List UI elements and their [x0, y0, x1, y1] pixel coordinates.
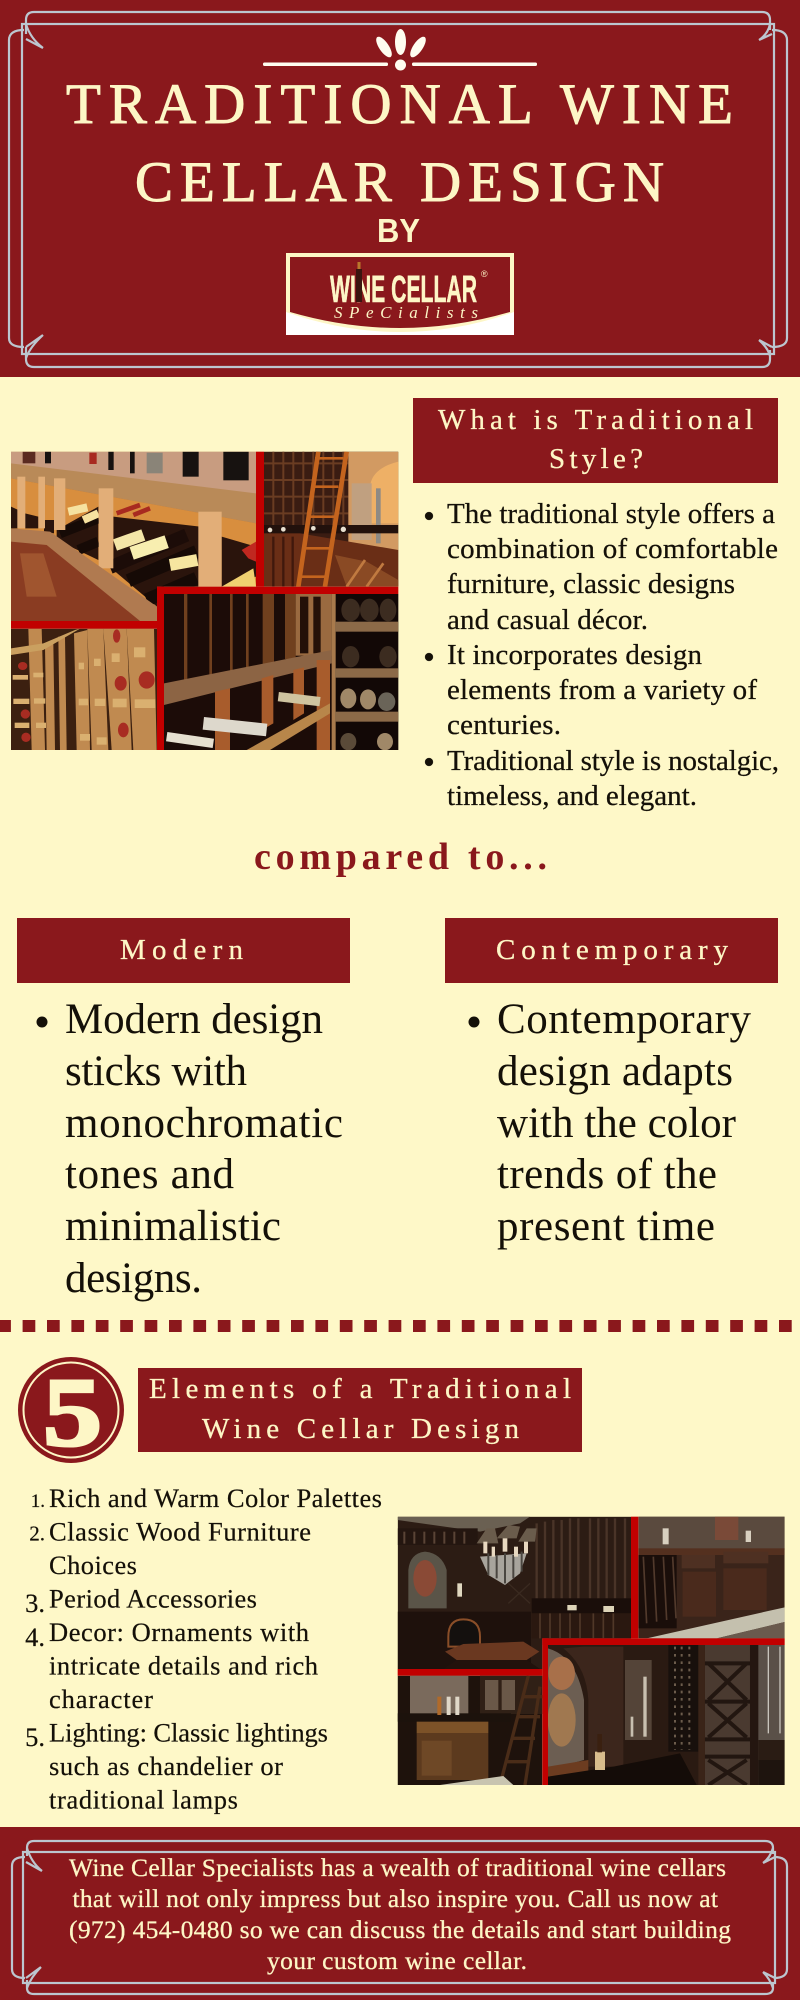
numbered list: five elements: intricate details and rich — [49, 1650, 318, 1680]
title: TRADITIONAL WINE — [66, 73, 733, 136]
logo: SPeCialists — [334, 303, 478, 322]
footer text: that will not only impress but also inspire you. Call us now at — [72, 1884, 718, 1913]
modern heading — [17, 918, 350, 983]
numbered list: five elements: traditional lamps — [49, 1784, 238, 1814]
heading: what is traditional style: What is Traditional — [438, 404, 753, 436]
panel: mural and lattice — [548, 1645, 785, 1785]
panel: ladder — [264, 452, 398, 587]
numbered list: five elements: character — [49, 1684, 153, 1714]
contemporary heading — [445, 918, 778, 983]
contemporary heading: Contemporary — [496, 934, 728, 966]
modern text: designs. — [65, 1255, 202, 1302]
footer text — [69, 1853, 731, 1975]
modern text: minimalistic — [65, 1203, 281, 1250]
bullet list: traditional style: and casual décor. — [447, 604, 648, 636]
numbered list: five elements: 5. — [25, 1722, 45, 1752]
header ornate frame — [9, 12, 787, 367]
bullet list: traditional style: elements from a variety of — [447, 674, 757, 706]
numbered list: five elements: Choices — [49, 1550, 137, 1580]
footer text: (972) 454-0480 so we can discuss the details and start building — [69, 1915, 731, 1944]
modern text: monochromatic — [65, 1100, 343, 1147]
collage dividers — [398, 1517, 785, 1785]
panel: cabinets — [638, 1517, 785, 1638]
modern text — [36, 996, 343, 1302]
panel: tan rack with blocks — [11, 629, 157, 750]
title: CELLAR DESIGN — [135, 151, 664, 214]
panel: ladder and bar — [398, 1676, 543, 1785]
footer ornate frame — [12, 1841, 787, 1994]
modern text: tones and — [65, 1151, 234, 1198]
footer banner — [0, 1827, 800, 2000]
numbered list: five elements: Rich and Warm Color Palettes — [49, 1483, 382, 1513]
heading: what is traditional style: Style? — [549, 443, 643, 475]
heading: compared to: compared to... — [254, 836, 547, 878]
numbered list: five elements — [25, 1483, 382, 1814]
bullet list: traditional style: furniture, classic designs — [447, 568, 735, 600]
modern heading: Modern — [120, 934, 244, 966]
numbered list: five elements: Lighting: Classic lightings — [49, 1718, 328, 1748]
panel: curved rack — [11, 452, 256, 622]
contemporary text — [468, 996, 752, 1250]
numbered list: five elements: Period Accessories — [49, 1584, 257, 1614]
contemporary text: design adapts — [497, 1048, 733, 1095]
ornament — [263, 29, 537, 70]
bullet list: traditional style — [425, 498, 779, 812]
logo: WINE CELLAR — [330, 269, 477, 311]
numbered list: five elements: Classic Wood Furniture — [49, 1516, 311, 1546]
number five badge — [18, 1357, 124, 1467]
modern text: sticks with — [65, 1048, 247, 1095]
panel: chandelier room — [398, 1517, 631, 1669]
contemporary text: with the color — [497, 1100, 736, 1147]
modern text: Modern design — [65, 996, 323, 1043]
photo collage: dark wood wine cellar — [398, 1517, 785, 1785]
logo: ® — [481, 269, 488, 279]
heading: five elements: Wine Cellar Design — [202, 1413, 520, 1445]
logo — [286, 253, 514, 335]
by label: BY — [377, 212, 420, 249]
panel: modern — [17, 918, 350, 1302]
heading: five elements: Elements of a Traditional — [149, 1373, 571, 1405]
panel: contemporary — [445, 918, 778, 1250]
numbered list: five elements: 4. — [25, 1622, 45, 1652]
heading: five elements — [138, 1368, 582, 1452]
bullet list: traditional style: It incorporates design — [447, 639, 702, 671]
bullet list: traditional style: The traditional style offers a — [447, 498, 775, 530]
numbered list: five elements: 1. — [31, 1491, 45, 1512]
photo collage: light wood wine racks — [11, 452, 398, 750]
footer text: Wine Cellar Specialists has a wealth of traditional wine cellars — [69, 1853, 726, 1882]
contemporary text: trends of the — [497, 1151, 717, 1198]
bullet list: traditional style: combination of comfortable — [447, 533, 778, 565]
title — [66, 73, 733, 214]
panel: dark rack and shelves — [164, 594, 398, 750]
contemporary text: present time — [497, 1203, 715, 1250]
header banner — [0, 0, 800, 377]
number five badge: 5 — [43, 1359, 102, 1467]
numbered list: five elements: 3. — [25, 1588, 45, 1618]
numbered list: five elements: such as chandelier or — [49, 1751, 283, 1781]
heading: what is traditional style — [413, 398, 778, 483]
numbered list: five elements: 2. — [29, 1522, 45, 1546]
numbered list: five elements: Decor: Ornaments with — [49, 1617, 309, 1647]
collage dividers — [11, 452, 398, 750]
bullet list: traditional style: centuries. — [447, 709, 561, 741]
bullet list: traditional style: timeless, and elegant. — [447, 780, 697, 812]
footer text: your custom wine cellar. — [267, 1946, 527, 1975]
contemporary text: Contemporary — [497, 996, 752, 1043]
bullet list: traditional style: Traditional style is nostalgic, — [447, 745, 779, 777]
